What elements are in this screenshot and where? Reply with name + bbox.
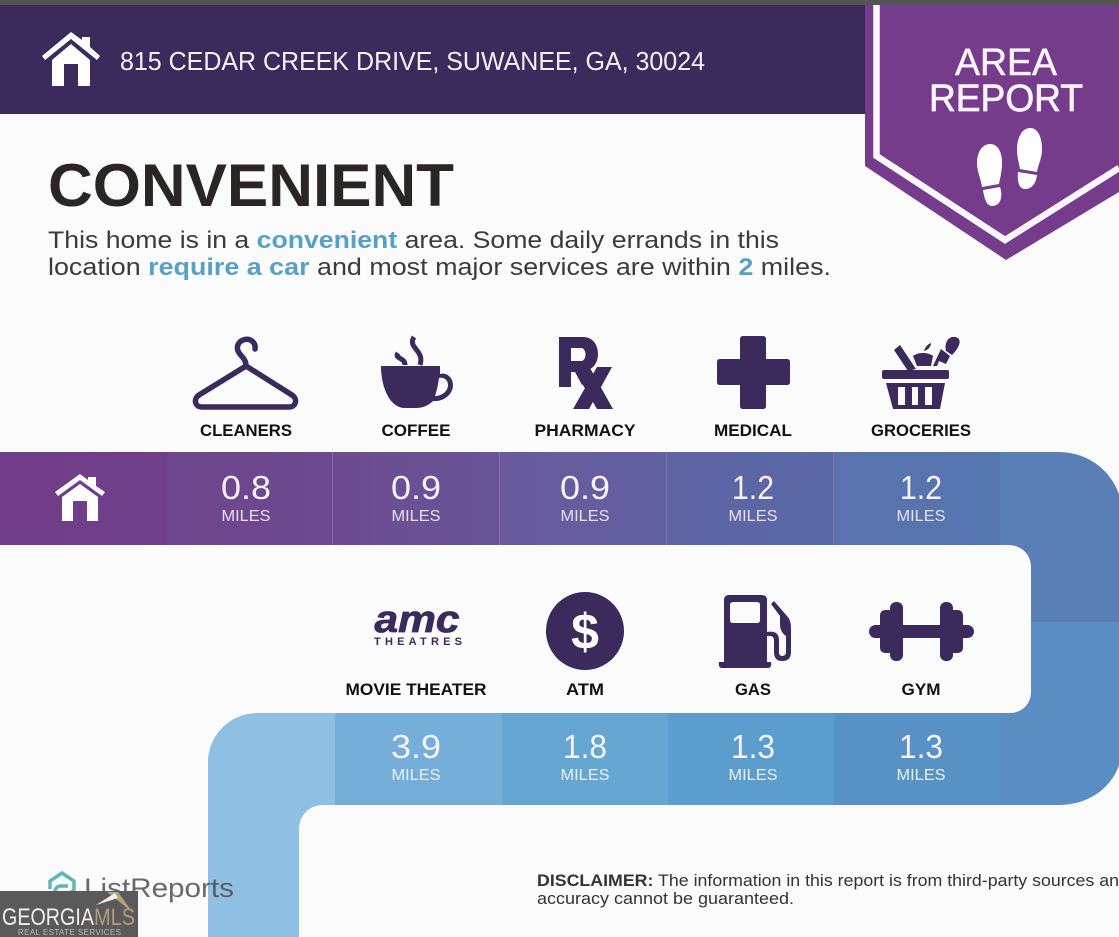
value: atm: 1.8 [563, 728, 607, 765]
label: pharmacy: PHARMACY [534, 421, 636, 440]
value: gym [896, 728, 946, 784]
value: gym: MILES [896, 767, 946, 784]
value: atm [560, 728, 610, 784]
row 1 segments [0, 452, 332, 545]
row 2 segments [834, 713, 1000, 805]
value: gas [728, 728, 778, 784]
badge heading: AREA [955, 42, 1058, 84]
icon: pharmacy Rx [559, 337, 613, 409]
disclaimer [537, 872, 1119, 908]
value: cleaners [221, 469, 271, 525]
icon: AMC theatres logo: amc [374, 599, 460, 641]
label: gas: GAS [735, 680, 771, 699]
intro text: This home is in a convenient area. Some daily errands in this [48, 227, 779, 254]
header band [0, 5, 866, 114]
value: cleaners: MILES [222, 508, 270, 525]
label: gym: GYM [902, 680, 940, 699]
georgia mls badge: MLS [94, 904, 135, 931]
icon: AMC theatres logo: THEATRES [374, 636, 462, 648]
icon: groceries basket [882, 337, 960, 409]
icon: medical cross [717, 336, 790, 409]
value: movie theater: 3.9 [391, 728, 441, 765]
value: coffee: 0.9 [391, 469, 441, 506]
georgia mls badge: REAL ESTATE SERVICES [18, 928, 121, 937]
icon: atm dollar coin [546, 592, 624, 670]
ribbon: route band [0, 452, 1119, 937]
value: movie theater [391, 728, 441, 784]
value: gas: 1.3 [731, 728, 775, 765]
icon: atm dollar coin: $ [571, 604, 599, 660]
value: gym: 1.3 [899, 728, 943, 765]
icon: cleaners hanger [195, 339, 296, 407]
value: groceries [896, 469, 946, 525]
value: atm: MILES [560, 767, 610, 784]
icon: gas pump [719, 595, 791, 668]
value: groceries: 1.2 [900, 469, 942, 506]
georgia mls badge: GEORGIA [2, 904, 94, 931]
value: medical [728, 469, 778, 525]
value: pharmacy [560, 469, 610, 525]
value: pharmacy: 0.9 [560, 469, 610, 506]
label: medical: MEDICAL [714, 421, 792, 440]
address: 815 CEDAR CREEK DRIVE, SUWANEE, GA, 30024 [120, 48, 705, 76]
label: groceries: GROCERIES [871, 421, 971, 440]
value: pharmacy: MILES [560, 508, 610, 525]
value: coffee: MILES [392, 508, 440, 525]
icon: coffee cup [381, 337, 453, 408]
value: movie theater: MILES [392, 767, 440, 784]
listreports logo: ListReports [84, 873, 234, 903]
disclaimer: DISCLAIMER: The information in this report is from third-party sources an [537, 872, 1119, 890]
intro text: location require a car and most major services are within 2 miles. [48, 254, 831, 281]
top edge strip [0, 0, 1119, 5]
value: medical: MILES [728, 508, 778, 525]
value: cleaners: 0.8 [221, 469, 271, 506]
value: coffee [391, 469, 441, 525]
disclaimer: accuracy cannot be guaranteed. [537, 890, 794, 908]
title: CONVENIENT [48, 152, 454, 219]
label: movie theater: MOVIE THEATER [346, 680, 486, 699]
value: groceries: MILES [896, 508, 946, 525]
value: gas: MILES [728, 767, 778, 784]
label: cleaners: CLEANERS [200, 421, 292, 440]
label: coffee: COFFEE [382, 421, 450, 440]
icon: house [42, 32, 100, 86]
icon: gym dumbbell [869, 602, 974, 661]
badge: area report: REPORT [929, 78, 1083, 120]
badge: area report [865, 5, 1119, 260]
intro text [48, 227, 831, 281]
icon: footprints [977, 128, 1042, 206]
georgia mls badge [0, 891, 138, 937]
value: medical: 1.2 [732, 469, 774, 506]
label: atm: ATM [566, 680, 604, 699]
row 1 values [221, 469, 946, 525]
icon: home in ribbon [55, 474, 105, 521]
row 2 values [391, 728, 946, 784]
